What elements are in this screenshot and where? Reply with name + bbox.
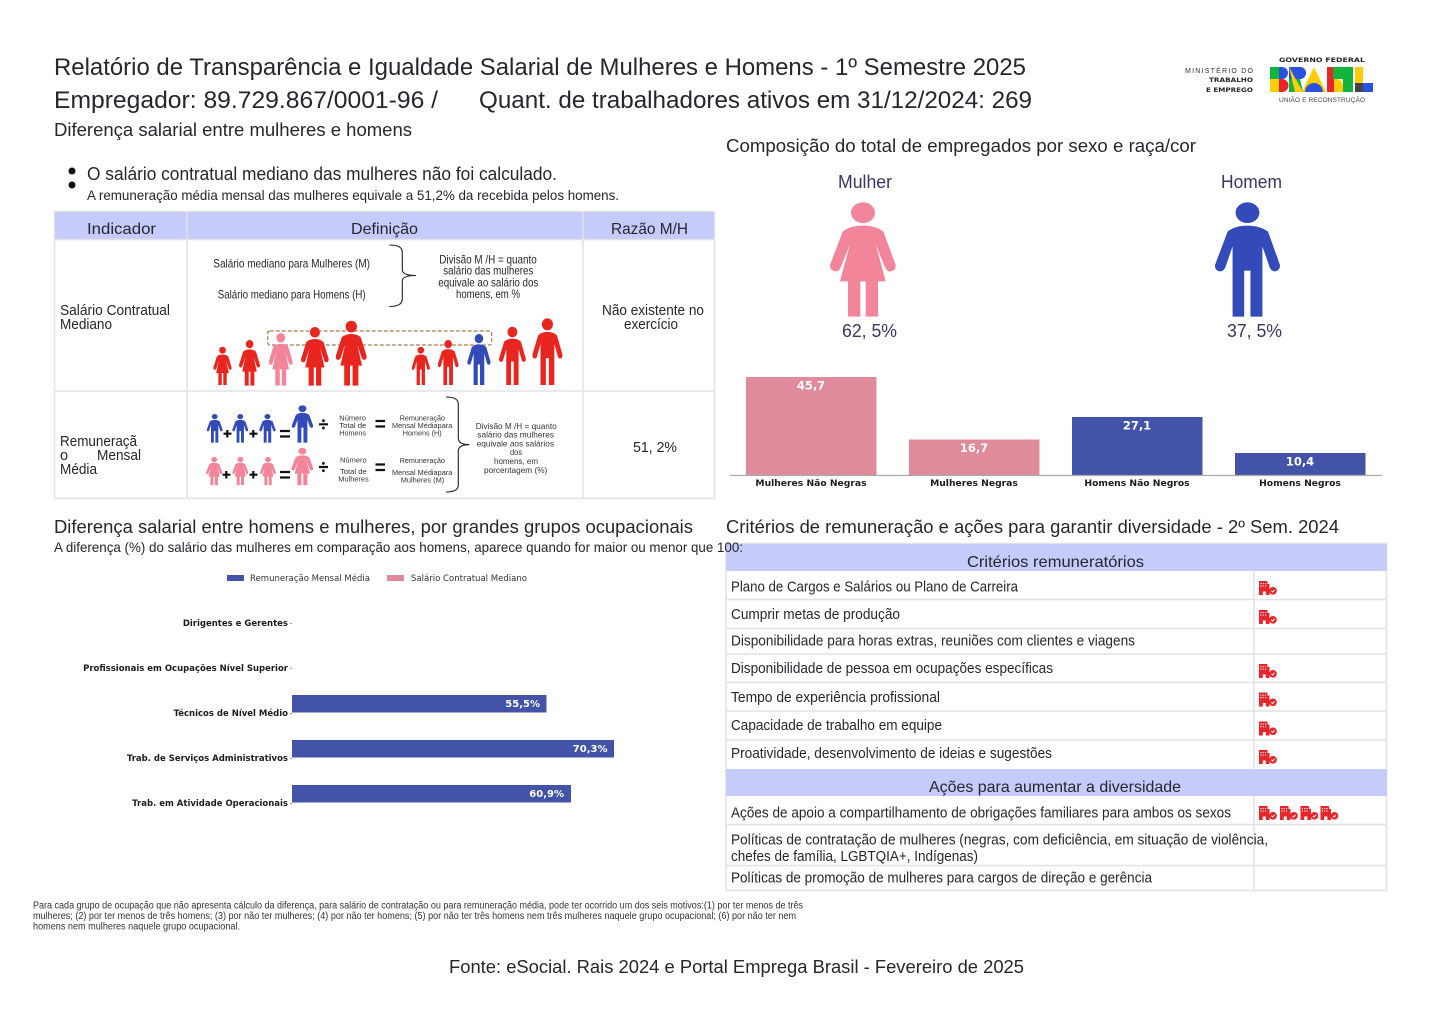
key findings bullets: O salário contratual mediano das mulheres não foi calculado. — [87, 164, 557, 184]
table header: Indicador — [87, 221, 157, 238]
category labels — [83, 619, 289, 809]
category labels: Profissionais em Ocupações Nível Superior — [83, 664, 289, 674]
header: critérios remuneratórios — [726, 544, 1387, 571]
mediana: faixa tracejada — [268, 331, 492, 345]
definição: remuneração mulheres: Mensal Médiapara — [392, 468, 453, 477]
row label: salário contratual mediano: Salário Contratual — [60, 303, 170, 319]
heading: grupos ocupacionais: Diferença salarial entre homens e mulheres, por grandes grupos ocupacionais — [54, 517, 693, 537]
pictograma: soma homens — [207, 405, 385, 443]
subheading: nota sobre a diferença: A diferença (%) do salário das mulheres em comparação aos homens, aparece quando for maior ou menor que 100: — [54, 539, 743, 555]
panel: critérios e ações — [726, 544, 1387, 890]
criteria rows: Disponibilidade para horas extras, reuniões com clientes e viagens — [731, 634, 1135, 650]
pictogram: mulher 62,5% — [830, 172, 897, 341]
row label: remuneração média: Média — [60, 462, 98, 478]
logo: ministério e governo federal: TRABALHO — [1209, 76, 1254, 84]
definição: salário mediano: Salário mediano para Mulheres (M) — [213, 256, 370, 270]
panel: tabela de indicadores — [54, 212, 714, 498]
bar chart: sexo e raça: Mulheres Não Negras — [755, 478, 867, 489]
row label: salário contratual mediano: Mediano — [60, 317, 112, 333]
chave: remuneração — [446, 397, 469, 492]
definição: remuneração homens: Remuneração — [400, 414, 445, 422]
footnote — [33, 900, 803, 932]
bar values — [505, 699, 608, 800]
title — [54, 54, 1032, 114]
heading: critérios: Critérios de remuneração e ações para garantir diversidade - 2º Sem. 2024 — [726, 517, 1339, 537]
bar chart: sexo e raça: Mulheres Negras — [930, 478, 1018, 489]
definição: remuneração homens: Total de — [339, 421, 366, 430]
title: Relatório de Transparência e Igualdade Salarial de Mulheres e Homens - 1º Semestre 2025 — [54, 54, 1026, 81]
action rows: chefes de família, LGBTQIA+, Indígenas) — [731, 849, 978, 865]
bar values: 55,5% — [505, 699, 540, 710]
bar chart: sexo e raça — [730, 377, 1382, 489]
bar chart: sexo e raça: 45,7 — [797, 378, 825, 392]
definição: salário mediano: Salário mediano para Homens (H) — [218, 288, 366, 302]
logo: ministério e governo federal — [1185, 56, 1373, 104]
footnote: Para cada grupo de ocupação que não apresenta cálculo da diferença, para salário de contratação ou para remuneração média, pode ter ocorrido um dos seis motivos:(1) por ter menos de três — [33, 900, 803, 912]
logo: ministério e governo federal: E EMPREGO — [1206, 86, 1254, 94]
row label: salário contratual mediano — [60, 303, 170, 333]
heading: diferença salarial: Diferença salarial entre mulheres e homens — [54, 120, 412, 140]
logo: ministério e governo federal: UNIÃO E RECONSTRUÇÃO — [1279, 95, 1365, 104]
definição: remuneração homens — [339, 414, 453, 438]
source: Fonte: eSocial. Rais 2024 e Portal Emprega Brasil - Fevereiro de 2025 — [449, 957, 1024, 977]
table header — [87, 221, 688, 238]
category labels: Trab. em Atividade Operacionais — [132, 799, 288, 809]
title: Quant. de trabalhadores ativos em 31/12/2024: 269 — [479, 87, 1032, 114]
pictograma: soma mulheres — [206, 448, 385, 485]
definição: salário mediano — [213, 252, 538, 302]
chart legend: Salário Contratual Mediano — [411, 574, 527, 584]
definição: remuneração homens: Mensal Médiapara — [392, 421, 453, 430]
footnote: mulheres; (2) por ter menos de três homens; (3) por não ter mulheres; (4) por não ter homens; (5) por não ter três homens nem três mulheres naquele grupo ocupacional; (6) por não ter nem — [33, 911, 796, 922]
definição: remuneração mulheres: Mulheres (M) — [401, 476, 445, 484]
action rows: Ações de apoio a compartilhamento de obrigações familiares para ambos os sexos — [731, 806, 1231, 822]
icons: empresa com critério — [1259, 581, 1338, 820]
definição: salário mediano: equivale ao salário dos — [438, 276, 538, 290]
definição: divisão remuneração: dos — [510, 447, 522, 457]
bars — [292, 695, 614, 802]
definição: remuneração mulheres: Mulheres — [338, 474, 369, 484]
row label: remuneração média — [60, 434, 141, 478]
row value: 51,2%: 51, 2% — [633, 440, 677, 456]
title: Empregador: 89.729.867/0001-96 / — [54, 87, 438, 114]
logo: ministério e governo federal: MINISTÉRIO DO — [1185, 66, 1254, 75]
definição: salário mediano: homens, em % — [456, 287, 520, 301]
criteria rows: Proatividade, desenvolvimento de ideias e sugestões — [731, 746, 1052, 762]
table header: Razão M/H — [611, 221, 688, 238]
category labels: Trab. de Serviços Administrativos — [127, 754, 288, 764]
pictogram: homem 37,5%: Homem — [1221, 172, 1282, 192]
pictogram: mulher 62,5%: 62, 5% — [842, 321, 897, 341]
pictograma: homens ordenados — [412, 318, 563, 385]
row value: não existente — [602, 303, 704, 333]
bar values: 60,9% — [529, 789, 564, 800]
definição: remuneração mulheres: Total de — [340, 467, 367, 476]
bar chart: sexo e raça: 16,7 — [960, 441, 988, 455]
header: ações — [726, 769, 1387, 796]
definição: divisão remuneração: equivale aos salários — [477, 439, 554, 449]
definição: salário mediano: Divisão M /H = quanto — [439, 252, 537, 266]
row value: não existente: exercício — [624, 317, 678, 333]
action rows — [731, 806, 1268, 886]
chart legend — [227, 573, 527, 584]
chave: salário mediano — [389, 245, 416, 306]
definição: remuneração mulheres: Remuneração — [400, 456, 445, 465]
definição: salário mediano: salário das mulheres — [443, 264, 533, 278]
category labels: Dirigentes e Gerentes — [183, 619, 288, 629]
definição: remuneração homens: Homens — [339, 428, 366, 438]
definição: divisão remuneração: porcentagem (%) — [484, 465, 547, 475]
bar chart: sexo e raça: Homens Não Negros — [1084, 478, 1190, 489]
definição: divisão remuneração: salário das mulheres — [477, 430, 554, 440]
pictograma: mulheres ordenadas — [213, 321, 367, 386]
criteria rows: Plano de Cargos e Salários ou Plano de Carreira — [731, 580, 1019, 596]
action rows: Políticas de promoção de mulheres para cargos de direção e gerência — [731, 870, 1153, 886]
bar chart: grupos ocupacionais — [83, 573, 614, 809]
logo: ministério e governo federal: GOVERNO FEDERAL — [1279, 56, 1365, 64]
definição: divisão remuneração: homens, em — [494, 456, 538, 466]
row value: não existente: Não existente no — [602, 303, 704, 319]
definição: divisão remuneração — [476, 421, 557, 475]
action rows: Políticas de contratação de mulheres (negras, com deficiência, em situação de violência, — [731, 832, 1268, 848]
bar chart: sexo e raça: 27,1 — [1123, 418, 1151, 432]
pictogram: mulher 62,5%: Mulher — [838, 172, 892, 192]
heading: composição: Composição do total de empregados por sexo e raça/cor — [726, 136, 1196, 156]
criteria rows: Capacidade de trabalho em equipe — [731, 718, 942, 734]
table header: Definição — [351, 221, 418, 238]
bar chart: sexo e raça: Homens Negros — [1259, 478, 1341, 489]
header: critérios remuneratórios: Critérios remuneratórios — [967, 554, 1144, 571]
pictogram: homem 37,5% — [1215, 172, 1282, 341]
key findings bullets: A remuneração média mensal das mulheres equivale a 51,2% da recebida pelos homens. — [87, 187, 619, 203]
criteria rows: Disponibilidade de pessoa em ocupações específicas — [731, 661, 1053, 677]
criteria rows: Cumprir metas de produção — [731, 607, 900, 623]
row label: remuneração média: o — [60, 448, 68, 464]
criteria rows — [731, 580, 1135, 762]
definição: remuneração mulheres: Número — [340, 456, 367, 464]
criteria rows: Tempo de experiência profissional — [731, 690, 940, 706]
definição: remuneração homens: Número — [339, 414, 366, 422]
header: ações: Ações para aumentar a diversidade — [929, 779, 1181, 796]
pictogram: homem 37,5%: 37, 5% — [1227, 321, 1282, 341]
row label: remuneração média: Mensal — [97, 448, 141, 464]
definição: remuneração homens: Homens (H) — [403, 428, 442, 438]
category labels: Técnicos de Nível Médio — [174, 708, 288, 719]
bar chart: sexo e raça: 10,4 — [1286, 454, 1314, 468]
key findings bullets — [68, 164, 619, 203]
row label: remuneração média: Remuneraçã — [60, 434, 138, 450]
definição: divisão remuneração: Divisão M /H = quanto — [476, 421, 557, 431]
footnote: homens nem mulheres naquele grupo ocupacional. — [33, 922, 240, 932]
chart legend: Remuneração Mensal Média — [250, 573, 370, 584]
definição: remuneração mulheres — [338, 456, 453, 484]
bar values: 70,3% — [573, 744, 608, 755]
